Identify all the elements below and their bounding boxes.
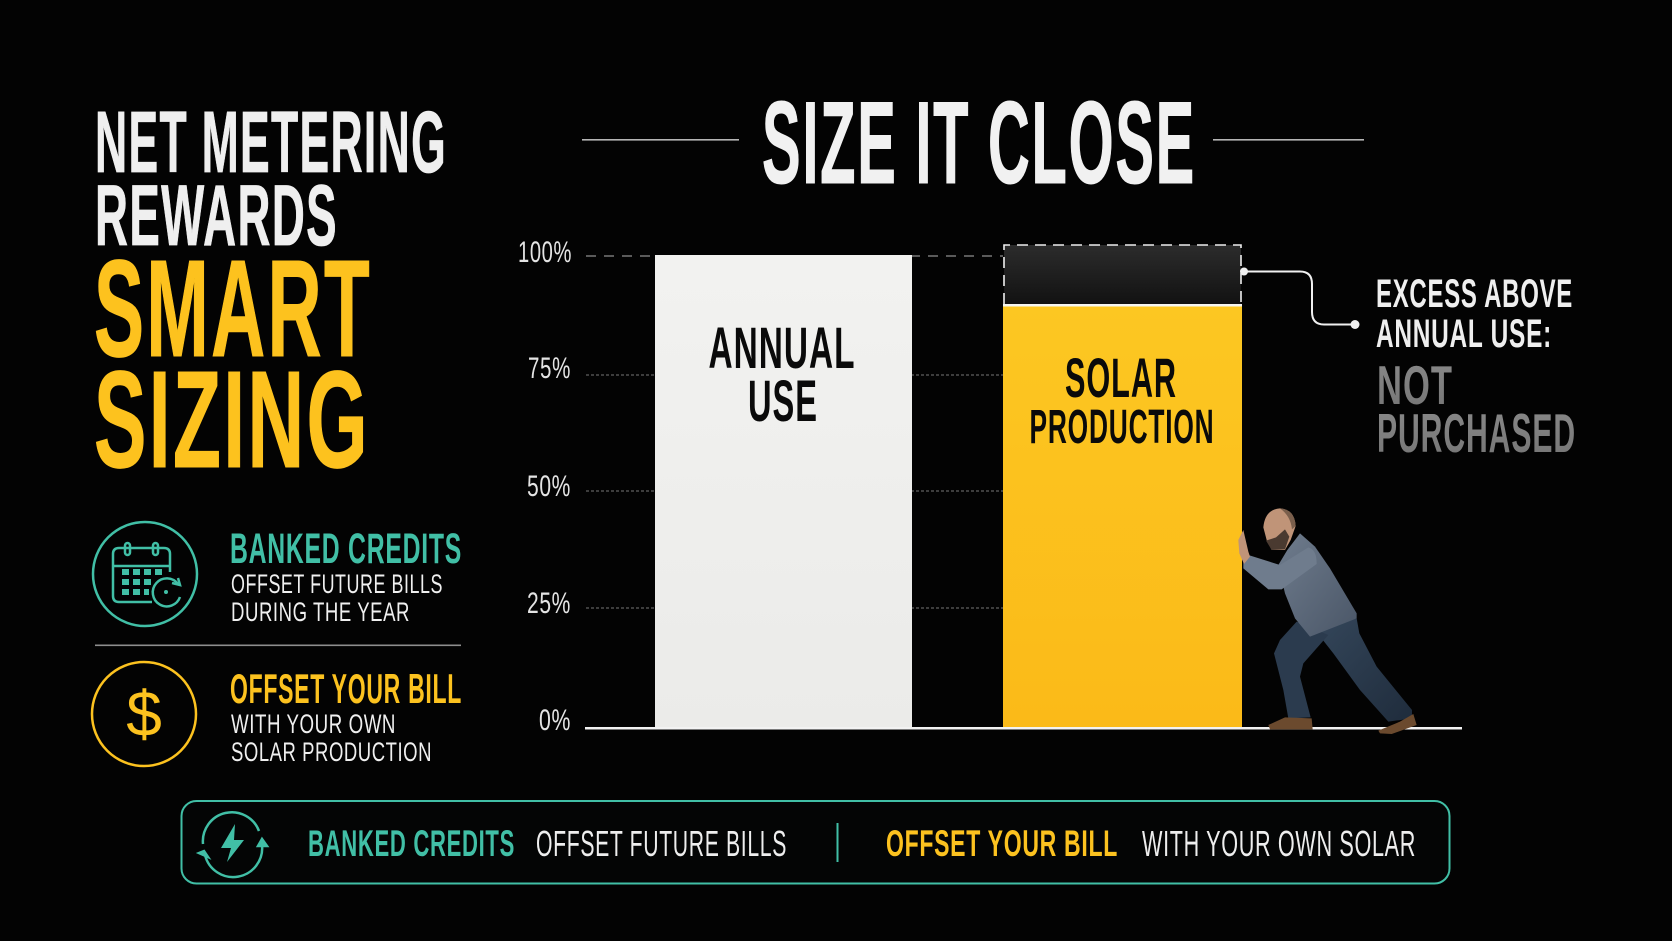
icon: man pushing bar (1238, 508, 1417, 734)
callout text (1376, 272, 1576, 464)
summary banner (182, 801, 1450, 884)
bar: solar production: SOLAR (1065, 346, 1177, 409)
beard (1266, 529, 1289, 550)
arm (1243, 547, 1317, 589)
back leg (1315, 618, 1412, 722)
title: NET METERING (95, 94, 447, 191)
head (1263, 508, 1296, 550)
text: offset future bills: OFFSET FUTURE BILLS (231, 569, 443, 599)
title: REWARDS (95, 168, 338, 264)
icon: bolt with cycle arrows (199, 812, 267, 877)
text: with your own solar production (231, 709, 432, 767)
y axis labels: 0% (539, 704, 571, 737)
heading: offset your bill: OFFSET YOUR BILL (230, 665, 462, 712)
bar: annual use: USE (748, 369, 818, 434)
bar chart (518, 236, 1462, 737)
y axis labels (518, 236, 572, 737)
bar: solar production: PRODUCTION (1030, 401, 1214, 454)
bar: annual use: ANNUAL (708, 316, 856, 381)
excess box (1004, 245, 1241, 304)
y axis labels: 50% (527, 470, 571, 503)
callout text: ANNUAL USE: (1376, 312, 1552, 356)
text: with your own solar production: SOLAR PRODUCTION (231, 737, 432, 767)
text: banked credits offset future bills: BANKED CREDITS (308, 823, 515, 864)
banked credits item (93, 522, 462, 627)
title (94, 94, 447, 497)
icon: dollar (92, 662, 196, 766)
hand (1238, 530, 1250, 564)
y axis labels: 100% (518, 236, 572, 269)
title: SMART (94, 232, 372, 386)
text: banked credits offset future bills: OFFSET FUTURE BILLS (536, 823, 787, 864)
back of hair (1280, 508, 1296, 529)
title: SIZING (94, 343, 370, 497)
offset your bill item (92, 662, 462, 767)
heading: banked credits: BANKED CREDITS (230, 525, 462, 573)
bar: solar production (1003, 304, 1242, 728)
connector arrow (1240, 268, 1360, 329)
callout text: NOT (1377, 354, 1453, 416)
left panel (92, 94, 462, 767)
bar: annual use (655, 255, 912, 728)
text: offset your bill with your own solar: WITH YOUR OWN SOLAR (1142, 823, 1416, 864)
text: offset future bills: DURING THE YEAR (231, 597, 410, 627)
front leg (1274, 622, 1328, 718)
icon: dollar: $ (126, 678, 162, 750)
callout: excess above annual use (1240, 268, 1576, 464)
torso (1278, 533, 1357, 637)
text: offset your bill with your own solar: OFFSET YOUR BILL (886, 823, 1118, 864)
y axis labels: 25% (527, 587, 571, 620)
text: with your own solar production: WITH YOUR OWN (231, 709, 396, 739)
y axis labels: 75% (528, 352, 571, 385)
icon: calendar (93, 522, 197, 626)
shoes (1268, 714, 1417, 734)
heading: size it close: SIZE IT CLOSE (762, 77, 1196, 208)
text: offset future bills (231, 569, 443, 627)
